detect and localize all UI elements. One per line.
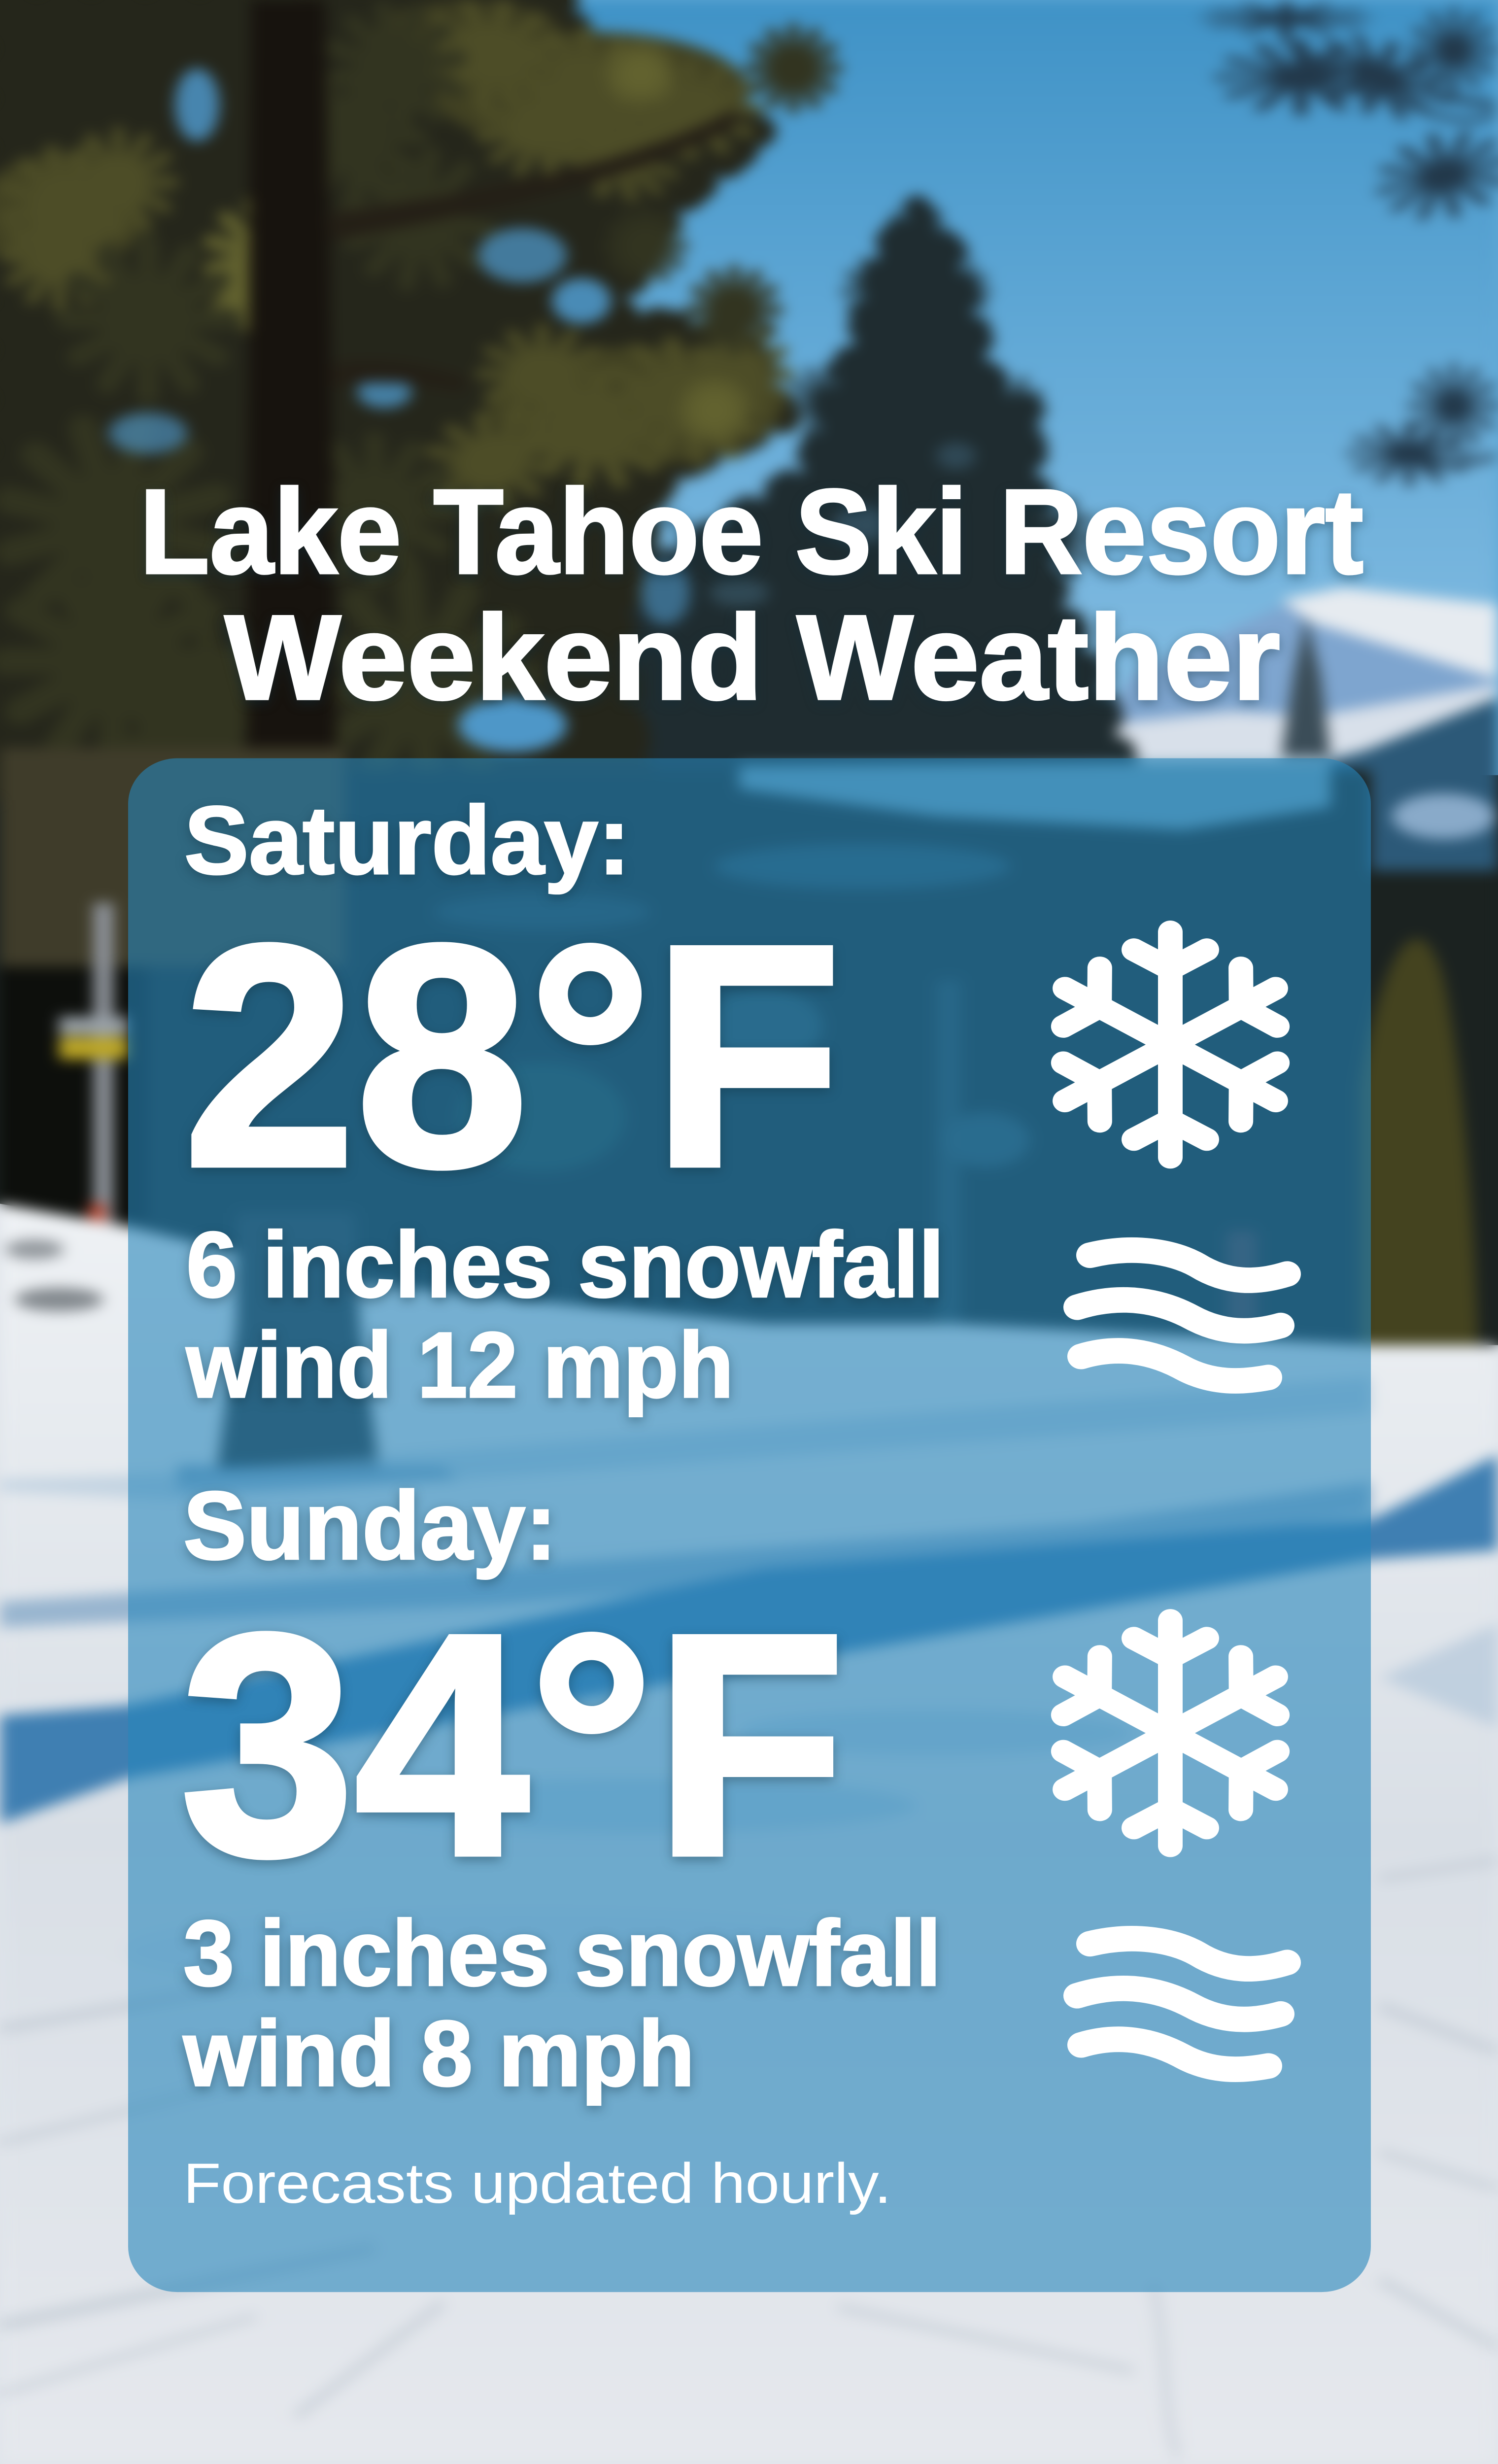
panel background: [128, 758, 1371, 2292]
snow texture streaks: [0, 1860, 1498, 2458]
snowfall text: 3 inches snowfall: [183, 1901, 941, 2005]
sky gaps: [108, 68, 690, 753]
ski lift pole and chair: [59, 903, 128, 1272]
title: Weekend Weather: [225, 590, 1280, 724]
heading: Sunday: Sunday:: [183, 1472, 557, 1580]
snowfall text: 6 inches snowfall: [186, 1212, 944, 1317]
wind text: wind 8 mph: [183, 2001, 695, 2105]
panel: weather forecast: [128, 758, 1371, 2292]
snow slope: [0, 1204, 1498, 2464]
left pine mass: [0, 0, 837, 817]
temperature: 28°F: 28°F: [183, 880, 842, 1232]
icon: snowflake: [1047, 932, 1294, 1157]
foliage clumps: [0, 0, 783, 465]
sky: [0, 0, 1498, 784]
trunk base over the snow: [177, 1213, 458, 1491]
footnote: Forecasts updated hourly.: [183, 2152, 891, 2215]
snow shadows: [0, 1239, 1498, 1992]
heading: Saturday: Saturday:: [184, 787, 630, 894]
main trunk and branches: [224, 0, 739, 1471]
title: Lake Tahoe Ski Resort: [139, 464, 1363, 599]
icon: wind: [1077, 1250, 1287, 1381]
temperature: 34°F: 34°F: [180, 1569, 846, 1921]
right-hand pine branches: [1205, 3, 1498, 484]
centre conifer: [517, 203, 1133, 784]
title: [139, 464, 1363, 724]
icon: snowflake: [1047, 1620, 1294, 1846]
light stripes behind the panel: [739, 761, 1330, 830]
section: Sunday: [180, 1472, 1294, 2105]
mountain: [1059, 587, 1498, 958]
icon: wind: [1077, 1939, 1287, 2069]
lower forest band: [0, 748, 1498, 1363]
section: Saturday: [183, 787, 1294, 1417]
small tree in front of the mountain: [1281, 616, 1330, 757]
wind text: wind 12 mph: [186, 1313, 734, 1417]
